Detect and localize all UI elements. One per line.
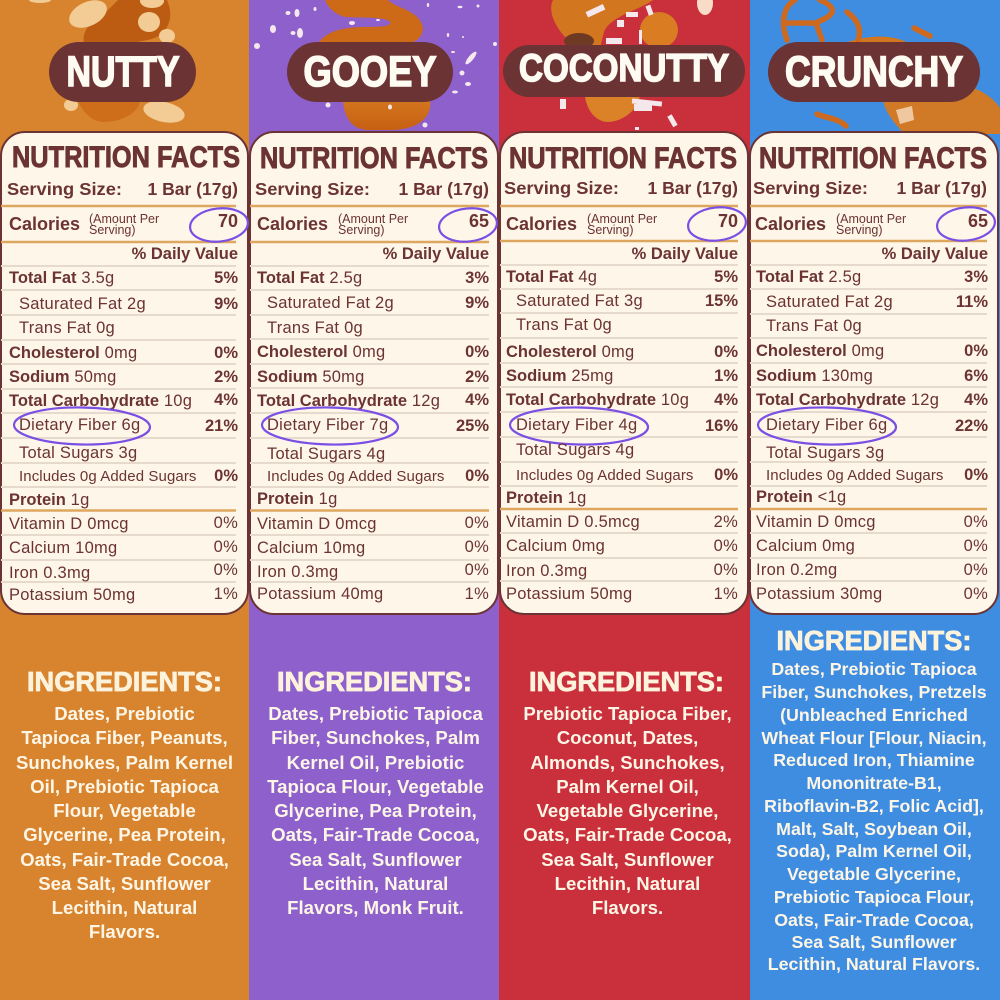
row: saturated fat <box>19 295 238 313</box>
ingredient list: Fiber, Sunchokes, Palm <box>271 727 480 748</box>
row: vitamin d <box>257 514 489 533</box>
ingredient list: Dates, Prebiotic <box>54 703 195 724</box>
row: total fat: 5% <box>214 269 238 287</box>
row: cholesterol: Cholesterol 0mg <box>9 344 137 362</box>
row: dietary fiber: Dietary Fiber 4g <box>516 416 637 434</box>
ingredient list: Lecithin, Natural <box>555 873 700 894</box>
heading: INGREDIENTS: <box>277 666 472 697</box>
serving size: Serving Size: <box>7 179 122 199</box>
row: added sugars: Includes 0g Added Sugars <box>267 468 445 485</box>
column: gooey <box>249 0 499 1000</box>
ingredient list: Sea Salt, Sunflower <box>541 849 714 870</box>
row: iron: Iron 0.3mg <box>9 564 90 582</box>
calories: Calories <box>506 214 577 234</box>
row: saturated fat: Saturated Fat 3g <box>516 292 643 310</box>
row: dietary fiber <box>766 416 988 435</box>
row: protein: Protein 1g <box>257 490 338 508</box>
row: sodium <box>506 367 738 385</box>
row: vitamin d: 0% <box>214 514 238 532</box>
row: dietary fiber <box>267 416 489 435</box>
row: trans fat: Trans Fat 0g <box>766 317 862 335</box>
daily value: % Daily Value <box>882 245 988 263</box>
row: calcium: 0% <box>465 538 489 556</box>
row: potassium <box>257 585 489 603</box>
ingredient list: Fiber, Sunchokes, Pretzels <box>761 682 987 702</box>
row: potassium: Potassium 40mg <box>257 585 383 603</box>
ingredient list: Sea Salt, Sunflower <box>289 849 462 870</box>
row: calcium: 0% <box>714 537 738 555</box>
calories: 70 <box>218 211 238 231</box>
serving size: Serving Size: <box>753 178 868 198</box>
row: dietary fiber: 22% <box>955 417 988 435</box>
row: sodium <box>756 367 988 385</box>
row: total fat: Total Fat 3.5g <box>9 269 114 287</box>
calories: Calories <box>257 214 328 234</box>
ingredient list: Tapioca Flour, Vegetable <box>267 776 484 797</box>
ingredient list: Glycerine, Pea Protein, <box>23 824 226 845</box>
column: crunchy <box>750 0 1000 1000</box>
ingredient list: Glycerine, Pea Protein, <box>274 800 477 821</box>
row: total sugars: Total Sugars 3g <box>766 444 884 462</box>
ingredient list: Palm Kernel Oil, <box>556 776 699 797</box>
serving size <box>255 179 489 199</box>
row: total carbohydrate: Total Carbohydrate 10g <box>506 391 689 409</box>
ingredient list: Soda), Palm Kernel Oil, <box>776 841 972 861</box>
ingredient list: Tapioca Fiber, Peanuts, <box>21 727 228 748</box>
ingredient list: Flavors. <box>592 897 663 918</box>
row: vitamin d: 0% <box>465 514 489 532</box>
row: iron: Iron 0.3mg <box>257 563 338 581</box>
serving size: 1 Bar (17g) <box>399 179 489 199</box>
ingredients: crunchy <box>761 625 987 974</box>
row: total carbohydrate: Total Carbohydrate 10g <box>9 392 192 410</box>
daily value: % Daily Value <box>632 245 738 263</box>
circle: fiber <box>14 406 150 446</box>
row: vitamin d <box>506 513 738 531</box>
serving size <box>504 178 738 198</box>
row: dietary fiber: 16% <box>705 417 738 435</box>
label: CRUNCHY <box>768 42 980 102</box>
row: dietary fiber <box>516 416 738 435</box>
ingredient list: Sunchokes, Palm Kernel <box>16 752 233 773</box>
panel: nutrition facts gooey <box>250 132 499 614</box>
column: coconutty <box>499 0 750 1000</box>
serving size: 1 Bar (17g) <box>897 178 987 198</box>
row: added sugars: Includes 0g Added Sugars <box>766 467 944 484</box>
circle: calories <box>935 205 997 243</box>
row: vitamin d <box>756 513 988 531</box>
row: potassium: 0% <box>964 585 988 603</box>
row: trans fat: Trans Fat 0g <box>267 319 363 337</box>
calories: Serving) <box>836 223 883 237</box>
row: iron <box>506 561 738 580</box>
row: saturated fat <box>516 292 738 310</box>
row: sodium: 2% <box>214 368 238 386</box>
row: total fat: 3% <box>465 269 489 287</box>
ingredient list: Sea Salt, Sunflower <box>791 932 957 952</box>
serving size: Serving Size: <box>255 179 370 199</box>
row: saturated fat: 9% <box>465 294 489 312</box>
row: vitamin d: 0% <box>964 513 988 531</box>
row: iron: 0% <box>465 561 489 579</box>
circle: fiber <box>510 406 648 446</box>
ingredient list: Flavors, Monk Fruit. <box>287 897 464 918</box>
row: dietary fiber: 21% <box>205 417 238 435</box>
ingredient list: Vegetable Glycerine, <box>537 800 718 821</box>
row: added sugars: Includes 0g Added Sugars <box>516 467 694 484</box>
image: caramel, almond and coconut <box>551 0 713 130</box>
row: vitamin d: Vitamin D 0.5mcg <box>506 513 640 531</box>
row: potassium: Potassium 50mg <box>9 586 135 604</box>
serving size <box>7 179 238 199</box>
row: saturated fat <box>267 294 489 312</box>
label: NUTTY: NUTTY <box>66 48 180 96</box>
row: total fat <box>9 269 238 287</box>
row: added sugars: Includes 0g Added Sugars <box>19 468 197 485</box>
row: dietary fiber: Dietary Fiber 6g <box>766 416 887 434</box>
row: total carbohydrate: 4% <box>964 391 988 409</box>
ingredient list: Kernel Oil, Prebiotic <box>287 752 464 773</box>
row: sodium <box>9 368 238 386</box>
calories <box>506 211 738 237</box>
serving size <box>753 178 987 198</box>
calories: (Amount Per <box>89 212 159 226</box>
row: sodium: Sodium 50mg <box>9 368 117 386</box>
daily value: % Daily Value <box>383 245 489 263</box>
panel: nutrition facts coconutty <box>500 132 748 614</box>
panel: nutrition facts crunchy <box>750 132 998 614</box>
row: added sugars: 0% <box>214 467 238 485</box>
row: cholesterol: 0% <box>714 343 738 361</box>
row: calcium <box>9 538 238 557</box>
row: total sugars: Total Sugars 4g <box>516 441 634 459</box>
calories: 70 <box>718 211 738 231</box>
row: calcium <box>756 537 988 555</box>
row: total fat <box>756 268 988 286</box>
row: dietary fiber <box>19 416 238 435</box>
circle: calories <box>437 206 499 244</box>
calories: Serving) <box>89 223 136 237</box>
row: saturated fat: Saturated Fat 2g <box>766 293 893 311</box>
serving size: Serving Size: <box>504 178 619 198</box>
ingredient list: Oats, Fair-Trade Cocoa, <box>774 910 974 930</box>
row: vitamin d <box>9 514 238 533</box>
ingredient list: Almonds, Sunchokes, <box>530 752 725 773</box>
row: iron <box>756 561 988 579</box>
row: trans fat: Trans Fat 0g <box>516 316 612 334</box>
row: protein: Protein <1g <box>756 488 846 506</box>
row: total carbohydrate: 4% <box>214 391 238 409</box>
ingredient list: Prebiotic Tapioca Fiber, <box>523 703 732 724</box>
row: vitamin d: Vitamin D 0mcg <box>257 515 377 533</box>
row: iron: 0% <box>714 561 738 579</box>
row: total carbohydrate: 4% <box>465 391 489 409</box>
row: calcium: 0% <box>964 537 988 555</box>
circle: fiber <box>262 406 398 446</box>
row: total fat: 3% <box>964 268 988 286</box>
ingredients: gooey <box>267 666 484 918</box>
label: CRUNCHY: CRUNCHY <box>785 48 963 96</box>
row: iron: Iron 0.3mg <box>506 562 587 580</box>
ingredient list: Flavors. <box>89 921 160 942</box>
circle: calories <box>188 206 250 244</box>
ingredient list <box>523 703 732 918</box>
row: total fat <box>506 268 738 286</box>
row: protein: Protein 1g <box>9 491 90 509</box>
row: cholesterol <box>257 343 489 361</box>
row: calcium: Calcium 10mg <box>9 539 117 557</box>
ingredient list: Dates, Prebiotic Tapioca <box>268 703 483 724</box>
row: saturated fat <box>766 293 988 311</box>
row: saturated fat: 9% <box>214 295 238 313</box>
row: cholesterol <box>756 342 988 360</box>
row: cholesterol <box>9 344 238 362</box>
heading: INGREDIENTS: <box>529 666 724 697</box>
ingredient list: Dates, Prebiotic Tapioca <box>771 659 977 679</box>
calories <box>257 211 489 237</box>
heading: NUTRITION FACTS <box>12 141 240 174</box>
ingredient list <box>761 659 987 974</box>
daily value: % Daily Value <box>132 245 238 263</box>
row: total carbohydrate: 4% <box>714 391 738 409</box>
row: potassium <box>9 585 238 604</box>
row: calcium: Calcium 0mg <box>506 537 605 555</box>
ingredient list: Oats, Fair-Trade Cocoa, <box>523 824 732 845</box>
row: saturated fat: 11% <box>956 293 988 311</box>
row: potassium: 1% <box>465 585 489 603</box>
row: total sugars: Total Sugars 3g <box>19 444 137 462</box>
row: calcium <box>506 537 738 555</box>
row: iron: 0% <box>214 561 238 579</box>
row: cholesterol: Cholesterol 0mg <box>506 343 634 361</box>
row: cholesterol: Cholesterol 0mg <box>257 343 385 361</box>
heading: INGREDIENTS: <box>27 666 222 697</box>
ingredient list: Vegetable Glycerine, <box>787 864 961 884</box>
row: potassium: 1% <box>214 585 238 603</box>
circle: calories <box>686 205 748 243</box>
row: total carbohydrate: Total Carbohydrate 12g <box>756 391 939 409</box>
heading: NUTRITION FACTS <box>260 142 488 175</box>
serving size: 1 Bar (17g) <box>648 178 738 198</box>
row: vitamin d: 2% <box>714 513 738 531</box>
ingredient list: Wheat Flour [Flour, Niacin, <box>761 728 987 748</box>
ingredients: coconutty <box>523 666 732 918</box>
row: trans fat: Trans Fat 0g <box>19 319 115 337</box>
calories: (Amount Per <box>587 212 657 226</box>
row: total fat: Total Fat 2.5g <box>257 269 362 287</box>
row: iron <box>257 561 489 581</box>
image: caramel and pretzels <box>784 0 1000 134</box>
row: sodium: 1% <box>714 367 738 385</box>
row: cholesterol: 0% <box>465 343 489 361</box>
row: saturated fat: 15% <box>705 292 738 310</box>
row: sodium: Sodium 130mg <box>756 367 873 385</box>
row: potassium: Potassium 50mg <box>506 585 632 603</box>
calories <box>755 211 988 237</box>
row: total fat: 5% <box>714 268 738 286</box>
row: sodium: Sodium 25mg <box>506 367 614 385</box>
calories: Calories <box>755 214 826 234</box>
calories: Serving) <box>338 223 385 237</box>
panel: nutrition facts nutty <box>1 132 250 614</box>
heading: NUTRITION FACTS <box>509 142 737 175</box>
calories: (Amount Per <box>836 212 906 226</box>
ingredient list: Lecithin, Natural <box>52 897 197 918</box>
row: added sugars: 0% <box>465 467 489 485</box>
row: saturated fat: Saturated Fat 2g <box>267 294 394 312</box>
row: total fat: Total Fat 4g <box>506 268 597 286</box>
ingredient list: Sea Salt, Sunflower <box>38 873 211 894</box>
row: cholesterol: 0% <box>214 344 238 362</box>
calories: (Amount Per <box>338 212 408 226</box>
ingredient list: Riboflavin-B2, Folic Acid], <box>764 796 984 816</box>
ingredient list: Coconut, Dates, <box>557 727 698 748</box>
row: potassium <box>506 585 738 603</box>
label: COCONUTTY: COCONUTTY <box>519 47 729 90</box>
row: total fat: Total Fat 2.5g <box>756 268 861 286</box>
row: iron: 0% <box>964 561 988 579</box>
calories <box>9 211 238 237</box>
heading: INGREDIENTS: <box>776 625 972 656</box>
row: vitamin d: Vitamin D 0mcg <box>756 513 876 531</box>
image: caramel and peanuts <box>29 0 187 126</box>
label: GOOEY <box>287 42 453 102</box>
ingredients: nutty <box>16 666 233 942</box>
calories: 65 <box>469 211 489 231</box>
row: sodium: Sodium 50mg <box>257 368 365 386</box>
label: GOOEY: GOOEY <box>304 48 436 96</box>
row: calcium: Calcium 10mg <box>257 539 365 557</box>
ingredient list: Oil, Prebiotic Tapioca <box>30 776 220 797</box>
row: potassium: Potassium 30mg <box>756 585 882 603</box>
row: potassium: 1% <box>714 585 738 603</box>
row: cholesterol: 0% <box>964 342 988 360</box>
label: NUTTY <box>49 42 196 102</box>
row: total carbohydrate: Total Carbohydrate 12g <box>257 392 440 410</box>
row: calcium: 0% <box>214 538 238 556</box>
ingredient list: Reduced Iron, Thiamine <box>773 750 975 770</box>
ingredient list: Oats, Fair-Trade Cocoa, <box>20 849 229 870</box>
row: dietary fiber: Dietary Fiber 7g <box>267 416 388 434</box>
ingredient list: Flour, Vegetable <box>53 800 196 821</box>
row: iron: Iron 0.2mg <box>756 561 837 579</box>
row: cholesterol: Cholesterol 0mg <box>756 342 884 360</box>
image: caramel and salt <box>254 0 497 130</box>
ingredient list: (Unbleached Enriched <box>780 705 968 725</box>
row: calcium: Calcium 0mg <box>756 537 855 555</box>
calories: Calories <box>9 214 80 234</box>
ingredient list <box>267 703 484 918</box>
ingredient list: Prebiotic Tapioca Flour, <box>774 887 974 907</box>
ingredient list: Oats, Fair-Trade Cocoa, <box>271 824 480 845</box>
row: total sugars: Total Sugars 4g <box>267 445 385 463</box>
ingredient list <box>16 703 233 942</box>
row: vitamin d: Vitamin D 0mcg <box>9 515 129 533</box>
calories: 65 <box>968 211 988 231</box>
row: sodium: 2% <box>465 368 489 386</box>
row: dietary fiber: Dietary Fiber 6g <box>19 416 140 434</box>
circle: fiber <box>758 406 896 446</box>
row: total fat <box>257 269 489 287</box>
row: sodium <box>257 368 489 386</box>
calories: Serving) <box>587 223 634 237</box>
row: dietary fiber: 25% <box>456 417 489 435</box>
row: iron <box>9 561 238 582</box>
serving size: 1 Bar (17g) <box>148 179 238 199</box>
ingredient list: Lecithin, Natural Flavors. <box>768 954 980 974</box>
ingredient list: Lecithin, Natural <box>303 873 448 894</box>
row: potassium <box>756 585 988 603</box>
row: protein: Protein 1g <box>506 489 587 507</box>
column: nutty <box>0 0 250 1000</box>
row: added sugars: 0% <box>964 466 988 484</box>
row: cholesterol <box>506 343 738 361</box>
row: calcium <box>257 538 489 557</box>
row: saturated fat: Saturated Fat 2g <box>19 295 146 313</box>
row: added sugars: 0% <box>714 466 738 484</box>
ingredient list: Malt, Salt, Soybean Oil, <box>776 819 972 839</box>
ingredient list: Mononitrate-B1, <box>806 773 942 793</box>
row: sodium: 6% <box>964 367 988 385</box>
